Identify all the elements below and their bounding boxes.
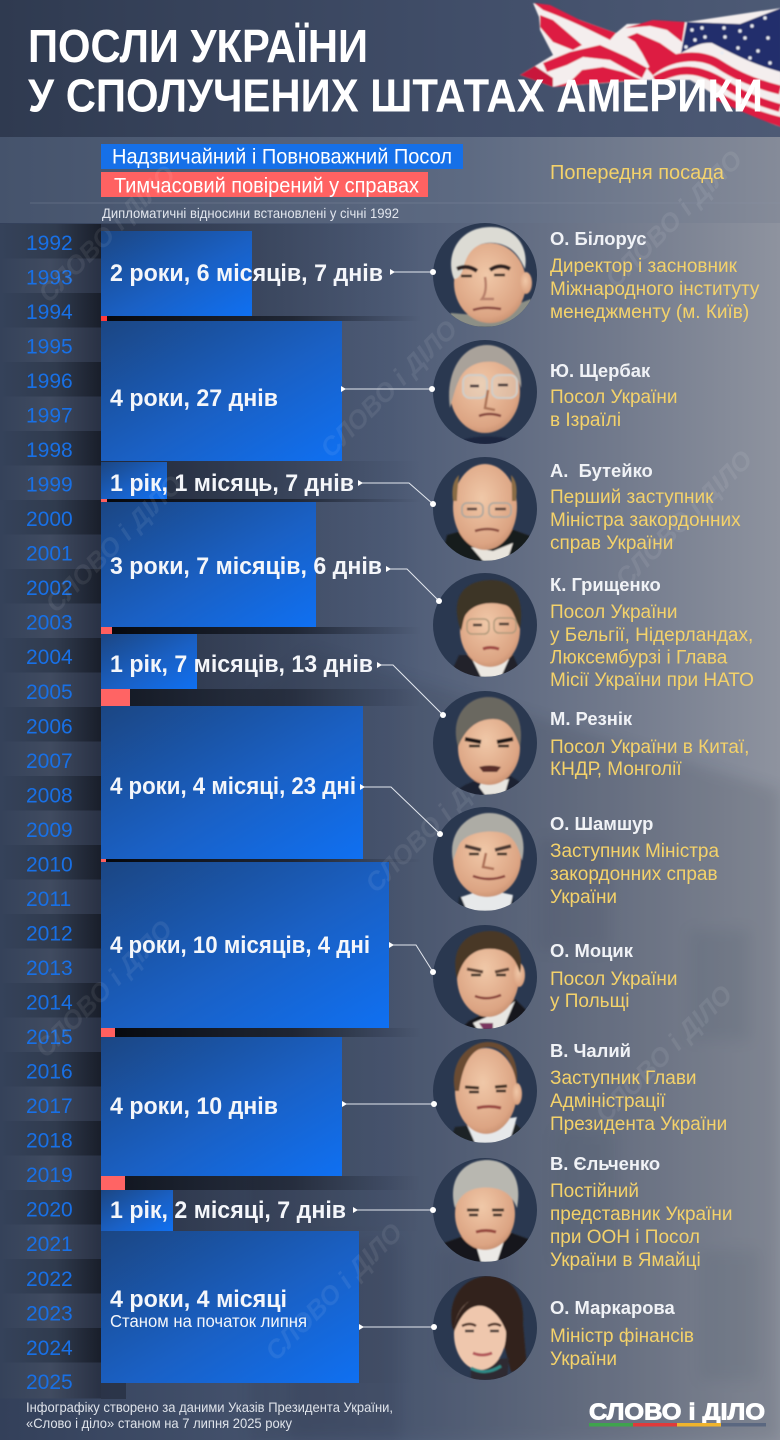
legend band: [0, 137, 780, 223]
bar: О. Моцик: [101, 862, 389, 1037]
profile text: Резнік: М. Резнік: [550, 708, 633, 729]
watermarks: СЛОВО і ДІЛО: [599, 144, 748, 293]
bar: Ю. Щербак: [101, 321, 342, 461]
portrait: Резнік: [433, 691, 537, 795]
bar duration labels: 1 рік, 1 місяць, 7 днів: [110, 470, 354, 497]
year column: 2003: [26, 612, 73, 634]
profile text: Чалий: Заступник Глави: [550, 1068, 697, 1089]
year column: 2023: [26, 1302, 73, 1326]
legend: ambassador: Надзвичайний і Повноважний Посол: [112, 144, 452, 168]
bar duration labels: 4 роки, 4 місяці: [110, 1286, 287, 1313]
watermarks: СЛОВО і ДІЛО: [589, 979, 738, 1128]
profile text: Грищенко: Посол України: [550, 602, 678, 623]
profile text: Грищенко: Люксембурзі і Глава: [550, 648, 728, 668]
header band: [0, 0, 780, 137]
year column: 1998: [26, 439, 73, 462]
profile text: Маркарова: О. Маркарова: [550, 1297, 675, 1318]
year column: 2004: [26, 646, 73, 669]
title: ПОСЛИ УКРАЇНИ: [28, 20, 368, 72]
year column: 2010: [26, 854, 73, 876]
year column: 2012: [26, 922, 73, 946]
year column: 2009: [26, 819, 73, 842]
profile text: Бутейко: Перший заступник: [550, 487, 714, 508]
year column: 1999: [26, 474, 73, 496]
profile text: Бутейко: справ України: [550, 533, 673, 554]
year column: 2002: [26, 577, 73, 600]
profile text: Чалий: В. Чалий: [550, 1040, 631, 1061]
profile text: Бутейко: А. Бутейко: [550, 460, 653, 481]
profile text: Грищенко: у Бельгії, Нідерландах,: [550, 625, 753, 646]
bar duration labels: [110, 260, 383, 1331]
profile text: Грищенко: [550, 574, 754, 691]
year column: 2005: [26, 681, 73, 704]
year column: 2007: [26, 750, 73, 773]
profile text: Шамшур: Заступник Міністра: [550, 841, 719, 862]
profile text: Моцик: у Польщі: [550, 991, 629, 1012]
profile text: Білорус: Директор і засновник: [550, 256, 738, 277]
bar: В. Чалий: [101, 1037, 342, 1190]
bar duration labels: Станом на початок липня: [110, 1311, 307, 1331]
year column: 2016: [26, 1060, 73, 1084]
legend: [101, 144, 463, 198]
profile text: Моцик: Посол України: [550, 969, 678, 990]
profile text: Бутейко: [550, 460, 741, 554]
profile text: Маркарова: [550, 1297, 694, 1370]
profile text: Чалий: Президента України: [550, 1114, 727, 1135]
profile text: Єльченко: [550, 1153, 732, 1271]
bar: О. Маркарова: [101, 1231, 359, 1383]
year column: 2022: [26, 1268, 73, 1291]
year column: 1992: [26, 232, 73, 255]
profile text: Шамшур: О. Шамшур: [550, 813, 653, 834]
portrait: Маркарова: [433, 1276, 537, 1380]
year column: 2011: [26, 888, 71, 911]
profile text: Маркарова: України: [550, 1349, 617, 1370]
title: [28, 20, 763, 122]
bar duration labels: 4 роки, 4 місяці, 23 дні: [110, 773, 356, 800]
watermarks: СЛОВО і ДІЛО: [314, 314, 463, 463]
year column: 2019: [26, 1164, 73, 1187]
flag: [520, 3, 780, 127]
portrait: Грищенко: [433, 573, 537, 677]
bar: В. Єльченко: [101, 1190, 173, 1231]
profile text: Щербак: [550, 360, 678, 431]
profile text: Маркарова: Міністр фінансів: [550, 1326, 694, 1347]
bar duration labels: 4 роки, 10 місяців, 4 дні: [110, 932, 370, 959]
footer source note: Інфографіку створено за даними Указів Президента України,: [26, 1399, 393, 1415]
connectors: [341, 269, 446, 1330]
year column: [0, 224, 101, 1398]
year column: 1997: [26, 404, 73, 428]
year column: 2024: [26, 1337, 73, 1360]
profile text: Грищенко: К. Грищенко: [550, 574, 661, 595]
legend: charge d'affaires: Тимчасовий повірений у справах: [114, 174, 419, 198]
profile text: Єльченко: Постійний: [550, 1181, 639, 1202]
portrait: Бутейко: [433, 457, 537, 561]
watermarks: СЛОВО і ДІЛО: [39, 469, 188, 618]
profile text: Єльченко: України в Ямайці: [550, 1250, 701, 1271]
footer source note: [26, 1399, 393, 1431]
year column: 2006: [26, 716, 73, 738]
profile text: Єльченко: В. Єльченко: [550, 1153, 660, 1174]
year column: 1993: [26, 266, 73, 290]
bar duration labels: 4 роки, 10 днів: [110, 1093, 278, 1120]
year column: 2018: [26, 1130, 73, 1152]
timeline shadows: [101, 224, 421, 1399]
portrait: Білорус: [433, 223, 537, 327]
watermarks: СЛОВО і ДІЛО: [359, 749, 508, 898]
bar: О. Білорус: [101, 231, 252, 321]
logo: СЛОВО і ДІЛО: [589, 1398, 765, 1424]
year column: 2017: [26, 1095, 73, 1118]
column heading: Попередня посада: [550, 161, 725, 184]
profile text: Білорус: менеджменту (м. Київ): [550, 302, 749, 323]
year column: 2015: [26, 1026, 73, 1049]
profile text: Моцик: О. Моцик: [550, 940, 634, 961]
year column: 2021: [26, 1233, 73, 1256]
year column: 2001: [26, 542, 73, 566]
portrait: Чалий: [433, 1039, 537, 1143]
watermarks: СЛОВО і ДІЛО: [32, 159, 181, 308]
year column: 2008: [26, 784, 73, 808]
profile text: Резнік: [550, 708, 749, 780]
profile text: Шамшур: [550, 813, 719, 908]
watermarks: СЛОВО і ДІЛО: [259, 1217, 408, 1366]
portrait: Єльченко: [433, 1158, 537, 1262]
profile text: Чалий: [550, 1040, 727, 1135]
profile text: Єльченко: представник України: [550, 1204, 732, 1225]
profile text: Білорус: Міжнародного інституту: [550, 279, 760, 300]
profile text: Щербак: в Ізраїлі: [550, 410, 621, 431]
bar duration labels: 1 рік, 7 місяців, 13 днів: [110, 651, 373, 678]
bar duration labels: 2 роки, 6 місяців, 7 днів: [110, 260, 383, 287]
profile text: Шамшур: закордонних справ: [550, 864, 718, 885]
year column: 2020: [26, 1198, 73, 1222]
profile text: Резнік: КНДР, Монголії: [550, 759, 682, 780]
bar: К. Грищенко: [101, 502, 316, 634]
portrait: Моцик: [433, 925, 537, 1029]
bar: М. Резнік: [101, 634, 197, 706]
profile text: Грищенко: Місії України при НАТО: [550, 670, 754, 691]
year column: 2013: [26, 957, 73, 980]
watermarks: СЛОВО і ДІЛО: [29, 914, 178, 1063]
profile text: Резнік: Посол України в Китаї,: [550, 737, 749, 758]
profile text: Щербак: Ю. Щербак: [550, 360, 651, 381]
year column: 2014: [26, 992, 73, 1014]
year column: 1995: [26, 336, 73, 358]
year column: 2025: [26, 1371, 73, 1394]
year column: 1994: [26, 301, 73, 324]
portrait: Щербак: [433, 340, 537, 444]
footer source note: «Слово і діло» станом на 7 липня 2025 року: [26, 1415, 292, 1431]
bar: А. Бутейко: [101, 462, 167, 502]
profile text: Чалий: Адміністрації: [550, 1091, 666, 1112]
profile text: Бутейко: Міністра закордонних: [550, 510, 741, 531]
year column: 2000: [26, 508, 73, 531]
divider note: Дипломатичні відносини встановлені у січні 1992: [102, 206, 399, 221]
portrait: Шамшур: [433, 807, 537, 911]
bar duration labels: 3 роки, 7 місяців, 6 днів: [110, 553, 382, 580]
watermarks: [29, 144, 758, 1366]
profile text: Моцик: [550, 940, 678, 1012]
year column: 1996: [26, 370, 73, 393]
profile text: Єльченко: при ООН і Посол: [550, 1227, 700, 1248]
profile text: Білорус: [550, 228, 760, 323]
profile text: Щербак: Посол України: [550, 387, 678, 408]
profile text: Шамшур: України: [550, 887, 617, 908]
bar duration labels: 4 роки, 27 днів: [110, 385, 278, 412]
bar duration labels: 1 рік, 2 місяці, 7 днів: [110, 1197, 346, 1224]
profile text: Білорус: О. Білорус: [550, 228, 647, 249]
watermarks: СЛОВО і ДІЛО: [609, 444, 758, 593]
bar: О. Шамшур: [101, 706, 363, 862]
